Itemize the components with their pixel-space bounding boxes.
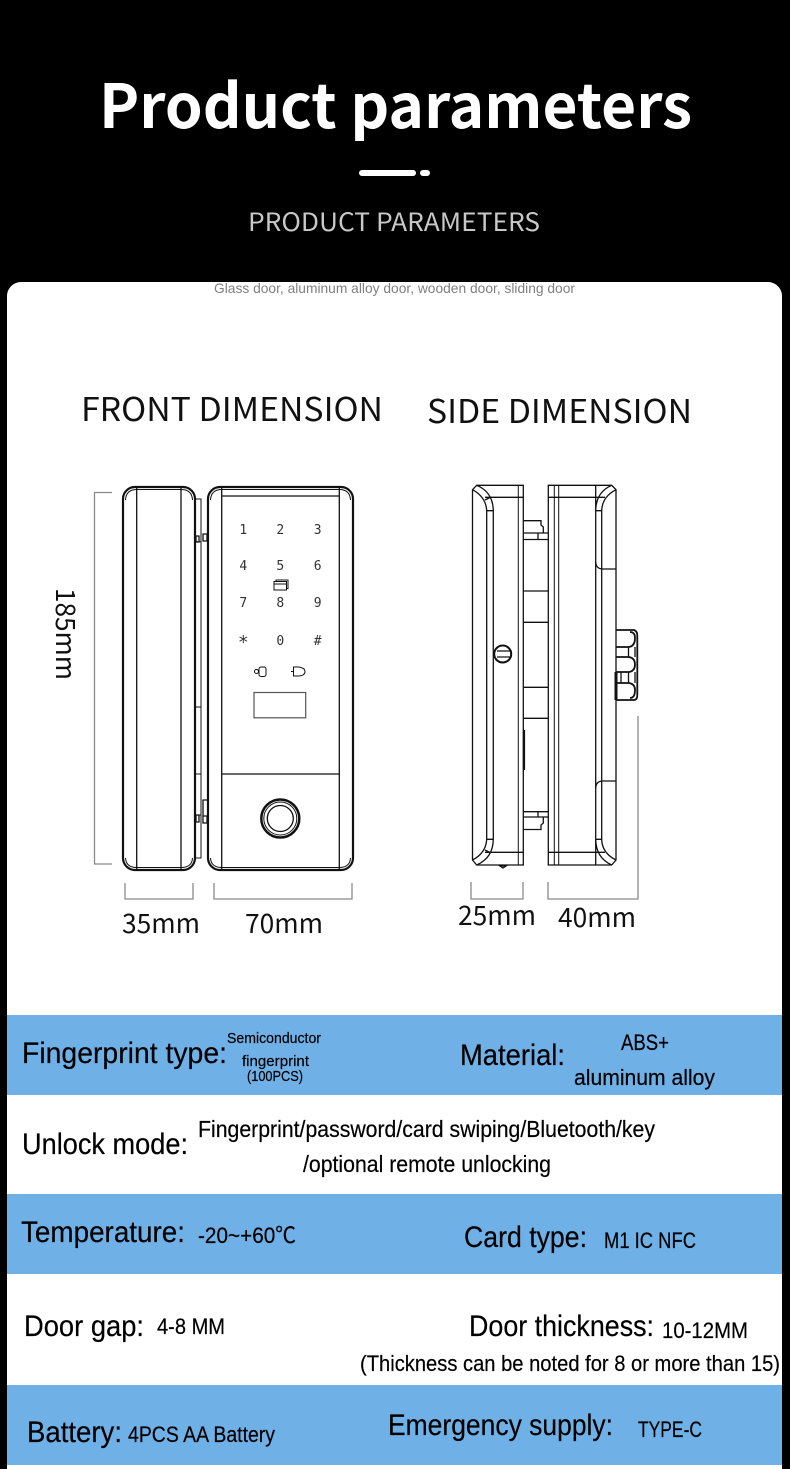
icon: card reader xyxy=(274,580,288,590)
spec row: fingerprint and material: Material: xyxy=(460,1039,565,1072)
title: Product parameters xyxy=(99,57,692,146)
label: 40mm: 40mm xyxy=(558,896,636,935)
display window xyxy=(254,692,306,718)
spec row: temperature and card type: M1 IC NFC xyxy=(604,1228,696,1253)
keypad: 2 xyxy=(276,523,284,538)
spec row: temperature and card type: Card type: xyxy=(464,1221,587,1254)
height dimension line xyxy=(94,492,112,864)
spec row: battery and emergency supply: TYPE-C xyxy=(638,1417,702,1442)
spec row: temperature and card type: -20~+60℃ xyxy=(198,1223,296,1248)
panel: white card xyxy=(7,282,782,1469)
heading: front dimension: FRONT DIMENSION xyxy=(81,384,383,431)
spec row: temperature and card type: Temperature: xyxy=(21,1216,185,1249)
icon: lock and bell xyxy=(254,667,305,676)
spec row: fingerprint and material: ABS+ xyxy=(621,1030,669,1055)
right half xyxy=(548,485,616,865)
label: 70mm: 70mm xyxy=(245,902,323,941)
spec row: unlock mode xyxy=(22,1116,655,1177)
spec row: door gap and thickness xyxy=(24,1310,780,1376)
keypad: 3 xyxy=(314,523,322,538)
bracket: 35mm xyxy=(125,883,193,899)
label: 185mm: 185mm xyxy=(48,588,87,680)
label: 35mm: 35mm xyxy=(122,902,200,941)
spec row: battery and emergency supply: Battery: xyxy=(27,1416,122,1449)
spec row: fingerprint and material xyxy=(7,1015,782,1095)
keypad: 9 xyxy=(314,596,322,611)
keypad: 5 xyxy=(276,559,284,574)
applicable doors caption: Glass door, aluminum alloy door, wooden door, sliding door xyxy=(214,280,575,296)
spec row: fingerprint and material: (100PCS) xyxy=(247,1068,303,1085)
side view drawing xyxy=(458,485,638,935)
spec row: door gap and thickness: Door gap: xyxy=(24,1310,144,1343)
middle connector xyxy=(524,521,548,830)
side knob xyxy=(616,630,637,700)
spec row: unlock mode: Unlock mode: xyxy=(22,1128,188,1161)
keypad: 1 xyxy=(239,523,247,538)
spec row: temperature and card type xyxy=(7,1194,782,1274)
left body xyxy=(123,487,195,870)
keypad xyxy=(238,523,322,653)
spec row: unlock mode: Fingerprint/password/card swiping/Bluetooth/key xyxy=(198,1116,655,1142)
spec row: battery and emergency supply: 4PCS AA Battery xyxy=(128,1422,275,1447)
spec row: fingerprint and material: Semiconductor xyxy=(227,1030,321,1047)
keypad: 0 xyxy=(276,634,284,649)
spec row: fingerprint and material: Fingerprint type: xyxy=(22,1037,227,1070)
subtitle: PRODUCT PARAMETERS xyxy=(248,203,540,239)
bracket: 25mm xyxy=(471,882,523,899)
title accent dash xyxy=(359,170,430,176)
keypad: 7 xyxy=(239,596,247,611)
spec row: door gap and thickness: 10-12MM xyxy=(662,1318,748,1343)
spec row: fingerprint and material: fingerprint xyxy=(242,1053,310,1070)
spec row: door gap and thickness: Door thickness: xyxy=(469,1310,654,1343)
spec row: unlock mode: /optional remote unlocking xyxy=(303,1151,551,1177)
bracket: 70mm xyxy=(214,883,352,899)
front view drawing xyxy=(48,487,353,941)
keypad: 4 xyxy=(239,559,247,574)
heading: side dimension: SIDE DIMENSION xyxy=(427,386,692,433)
spec row: fingerprint and material: aluminum alloy xyxy=(574,1065,715,1090)
fingerprint sensor xyxy=(261,800,299,838)
keypad: 8 xyxy=(276,596,284,611)
keypad: # xyxy=(314,634,322,649)
spec row: battery and emergency supply: Emergency supply: xyxy=(388,1409,613,1442)
spec row: battery and emergency supply xyxy=(7,1385,782,1465)
right body xyxy=(208,487,353,870)
keypad: * xyxy=(238,632,249,653)
label: 25mm: 25mm xyxy=(458,894,536,933)
bracket: 40mm xyxy=(548,716,638,899)
left half xyxy=(472,485,524,868)
hinge xyxy=(196,499,207,858)
keypad: 6 xyxy=(314,559,322,574)
spec row: door gap and thickness: 4-8 MM xyxy=(157,1314,225,1339)
